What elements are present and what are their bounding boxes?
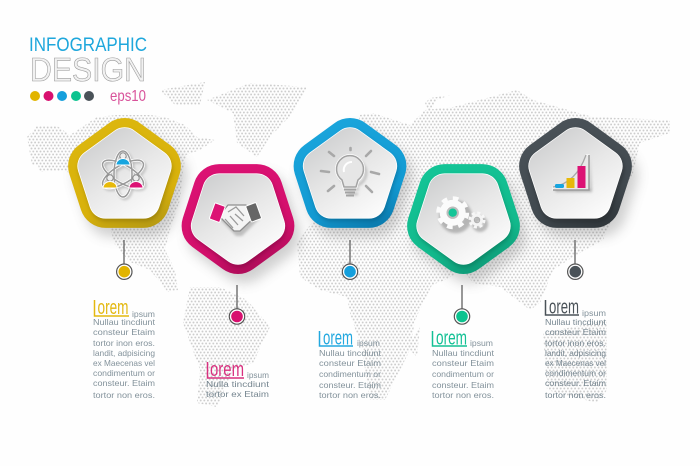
yellow connector marker [117, 240, 132, 279]
text block: green: tortor non eros. [432, 390, 494, 400]
text block: blue: ipsum [357, 338, 380, 348]
text block: dark: tortor non eros. [545, 390, 606, 400]
text block: blue: Nullau tincdiunt [319, 348, 382, 358]
text block: dark: ex Maecenas vel [545, 358, 606, 368]
text block: yellow: landit, adpisicing [93, 348, 155, 358]
text block: magenta: Nulla tincdiunt [206, 379, 270, 389]
text block: dark: consteur. Etaim [545, 378, 606, 388]
text block: green: orem [436, 328, 467, 350]
text block: yellow: condimentum or [93, 368, 155, 378]
text block: magenta: ipsum [247, 370, 269, 380]
text block: blue: consteur Etaim [319, 358, 381, 368]
text block: green: consteur Etaim [432, 358, 494, 368]
text block: green: ipsum [470, 338, 493, 348]
icon: light bulb [321, 148, 379, 196]
text block: yellow: ex Maecenas vel [93, 358, 155, 368]
colour swatches [30, 91, 94, 101]
text block: yellow: Nullau tincdiunt [93, 317, 156, 327]
dotted world map [27, 82, 670, 407]
title: INFOGRAPHIC [29, 35, 147, 56]
text block: dark: consteur Etaim [545, 327, 606, 337]
text block: dark: tortor inon eros. [545, 338, 606, 348]
text block: dark: landit, adpisicing [545, 348, 606, 358]
text block: blue: condimentum or [319, 369, 381, 379]
icon: gears [439, 199, 486, 230]
panel: green pentagon [433, 190, 500, 257]
text block: magenta: orem [210, 359, 244, 381]
icon: handshake [209, 202, 262, 236]
text block: dark [545, 296, 607, 400]
text block: magenta: tortor ex Etaim [206, 389, 269, 399]
text block: green: Nullau tincdiunt [432, 348, 495, 358]
text block: blue: orem [323, 328, 353, 350]
text block: dark: ipsum [582, 308, 606, 318]
text block: green: condimentum or [432, 369, 494, 379]
dark connector marker [568, 240, 583, 279]
icon: atom with people [99, 151, 149, 199]
text block: yellow: consteur. Etaim [93, 378, 155, 388]
text block: blue [319, 328, 382, 400]
panel: dark pentagon [545, 144, 612, 211]
blue connector marker [342, 240, 358, 279]
panel: magenta pentagon [208, 190, 274, 257]
text block: dark: Nullau tincdiunt [545, 317, 607, 327]
text block: green [432, 328, 495, 400]
text block: dark: condimentum or [545, 368, 606, 378]
panel: yellow pentagon [94, 144, 161, 211]
text block: yellow: tortor non eros. [93, 390, 155, 400]
text block: yellow: ipsum [132, 309, 155, 319]
text block: blue: consteur. Etaim [319, 380, 381, 390]
text block: dark: orem [549, 296, 579, 318]
text block: green: consteur. Etaim [432, 380, 494, 390]
green connector marker [454, 285, 470, 324]
text block: magenta [206, 359, 270, 399]
text block: yellow: tortor inon eros. [93, 338, 155, 348]
text block: blue: tortor non eros. [319, 390, 381, 400]
text block: yellow: consteur Etaim [93, 327, 155, 337]
text block: yellow [93, 297, 156, 400]
magenta connector marker [229, 285, 245, 324]
panel: blue pentagon [320, 144, 386, 211]
text block: yellow: orem [98, 297, 128, 319]
title [29, 35, 147, 88]
icon: growth chart [553, 155, 592, 192]
eps10 label: eps10 [110, 88, 146, 105]
title: DESIGN [30, 51, 146, 88]
